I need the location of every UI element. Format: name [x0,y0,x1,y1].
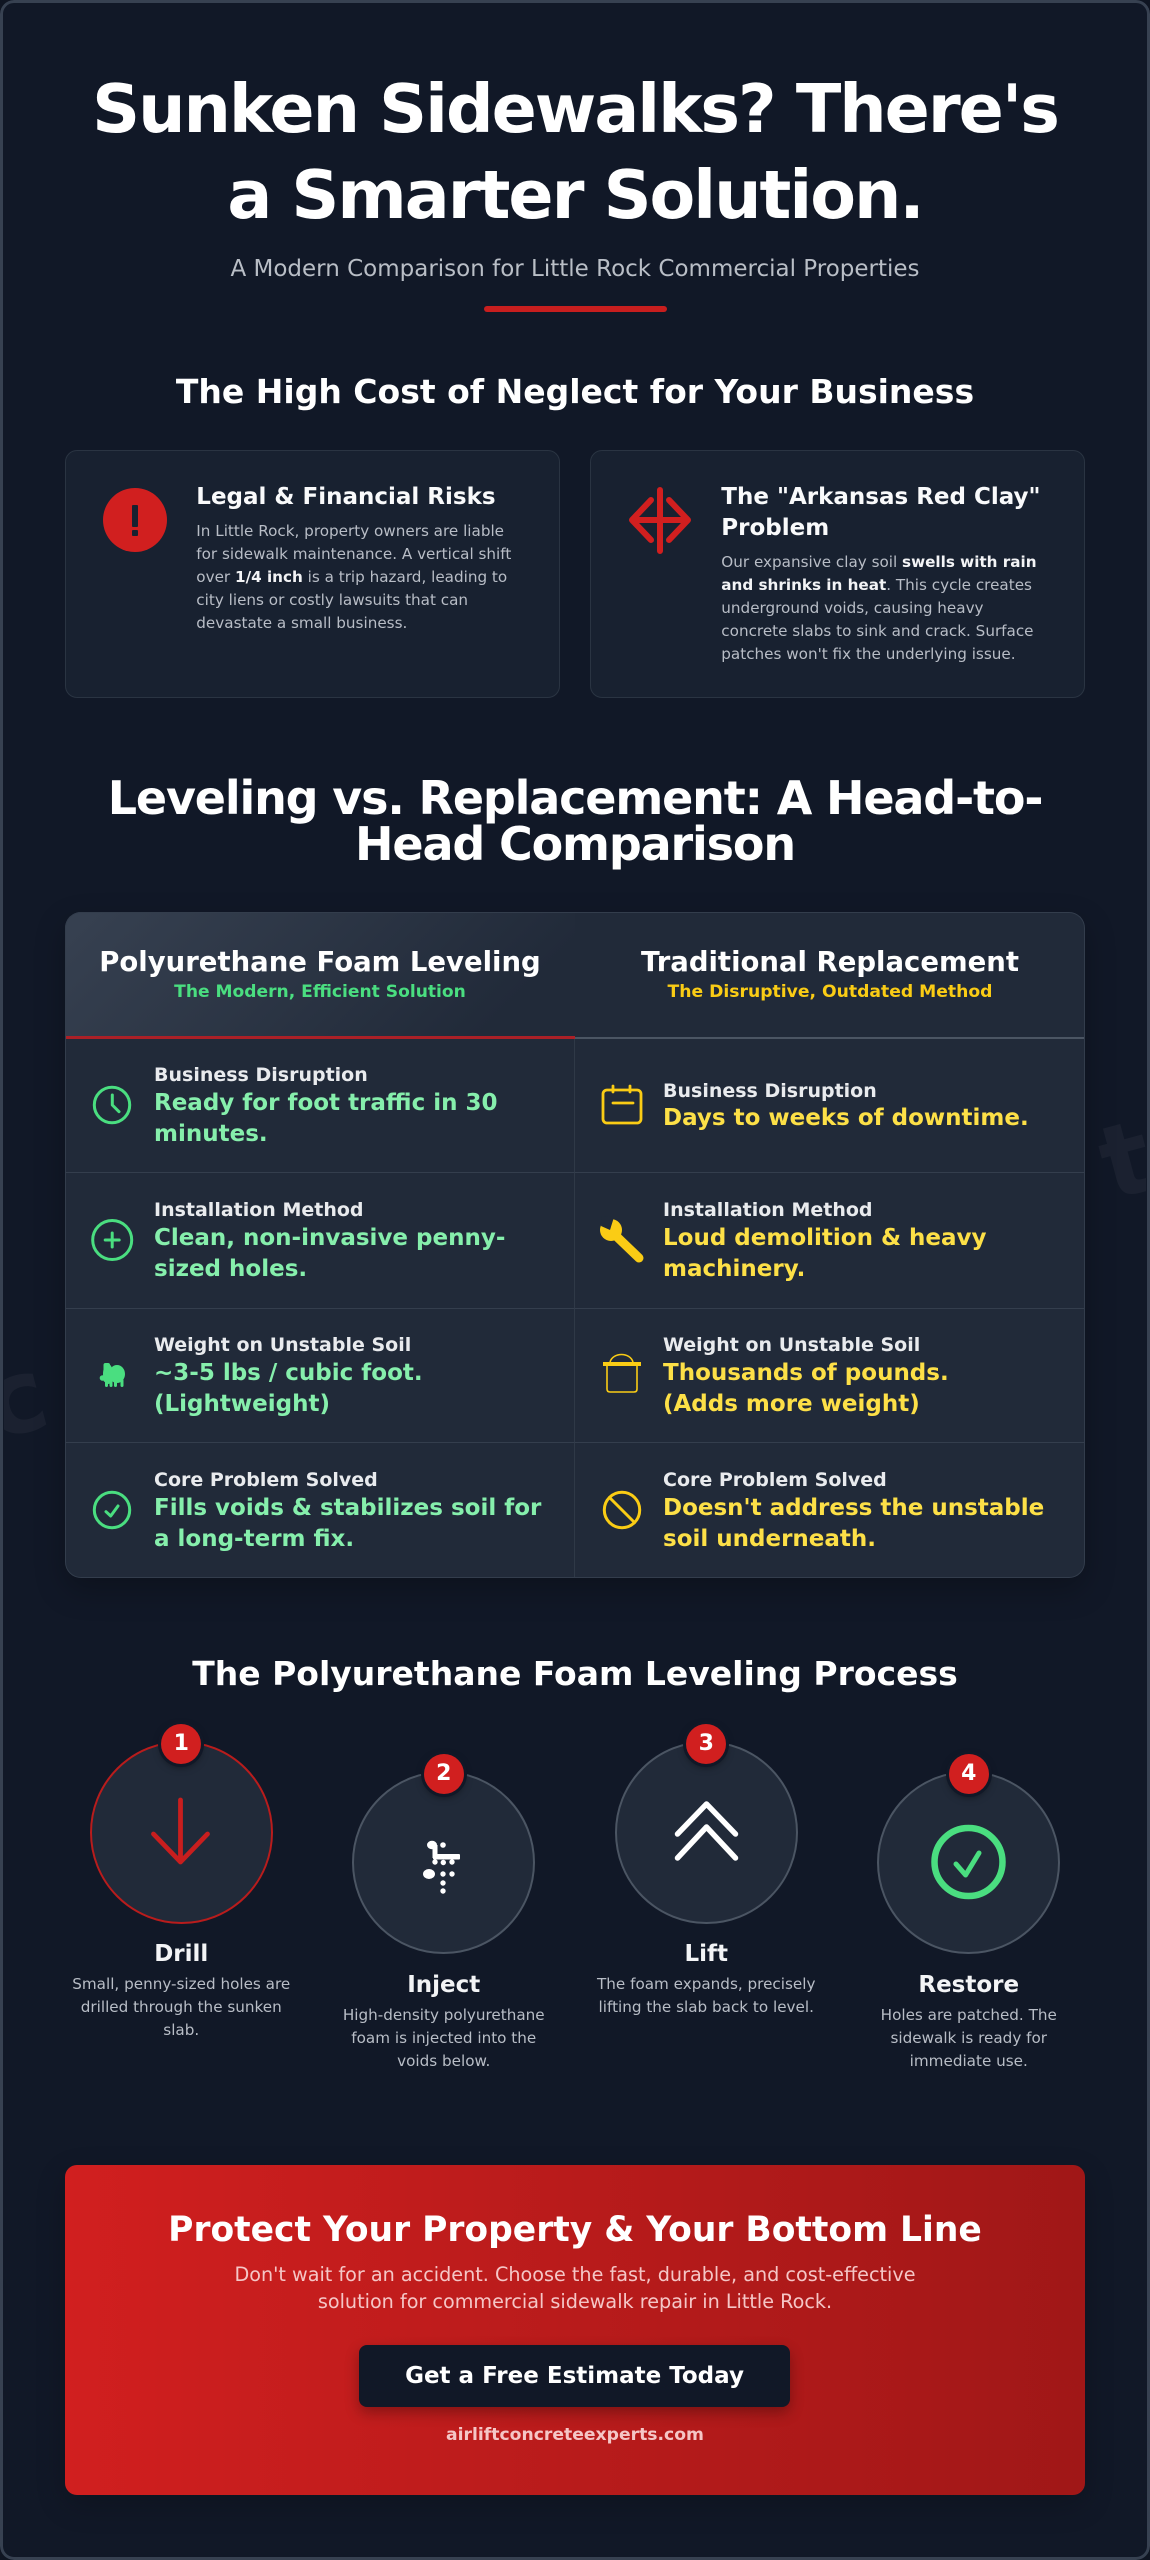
title: a Smarter Solution. [227,156,923,234]
row 2 left: installation method [65,1172,575,1308]
value: machinery. [663,1256,805,1282]
step description [343,2006,545,2070]
step circle with icon [877,1771,1060,1954]
panel: legal and financial risks [65,450,560,698]
column header: polyurethane foam leveling [65,912,575,1039]
step description [596,1975,815,2016]
row 3 right: weight on unstable soil [575,1308,1085,1442]
card body text: underground voids, causing heavy [721,599,984,617]
cta button [359,2345,790,2407]
icon: expanding soil arrows [629,487,691,554]
step title: Lift [684,1941,728,1967]
value: Clean, non-invasive penny- [154,1224,505,1250]
heading: foam leveling process: The Polyurethane Foam Leveling Process [192,1654,958,1693]
value [154,1090,497,1147]
step description: Holes are patched. The [881,2006,1057,2024]
website url: airliftconcreteexperts.com [446,2425,704,2445]
value: Days to weeks of downtime. [663,1104,1029,1130]
title [92,70,1058,234]
step description: immediate use. [910,2052,1028,2070]
step title: Inject [407,1972,480,1998]
cta button: Get a Free Estimate Today [405,2363,744,2389]
card body text [196,522,511,632]
card body text: In Little Rock, property owners are liable [196,522,504,540]
column header: traditional replacement [575,912,1085,1039]
heading: leveling vs replacement [108,771,1042,871]
value: Doesn't address the unstable [663,1494,1044,1520]
card body text: devastate a small business. [196,614,407,632]
row 1 right: business disruption [575,1039,1085,1172]
icon: check circle [92,1490,132,1530]
comparison table [65,912,1085,1578]
label: Installation Method [663,1199,873,1221]
heading: leveling vs replacement: Leveling vs. Replacement: A Head-to- [108,771,1042,825]
card body text: over 1/4 inch is a trip hazard, leading to [196,568,507,586]
card body text: Our expansive clay soil swells with rain [721,553,1037,571]
column subtitle: The Modern, Efficient Solution [174,982,466,1002]
card body text: concrete slabs to sink and crack. Surface [721,622,1034,640]
value: Loud demolition & heavy [663,1224,987,1250]
step description: slab. [163,2021,199,2039]
value: ~3-5 lbs / cubic foot. [154,1360,423,1386]
call to action panel [65,2165,1085,2495]
label: Core Problem Solved [663,1469,887,1491]
value: Thousands of pounds. [663,1360,949,1386]
step number [686,1724,726,1764]
value [154,1494,542,1552]
heading: leveling vs replacement: Head Comparison [355,817,795,871]
step title: Restore [918,1972,1019,1998]
value [663,1224,987,1282]
value: minutes. [154,1121,268,1147]
value [154,1224,505,1282]
step 2: inject [343,1754,545,2070]
panel: arkansas red clay problem [590,450,1085,698]
subtitle: A Modern Comparison for Little Rock Commercial Properties [230,256,920,282]
card body text: city liens or costly lawsuits that can [196,591,468,609]
value: soil underneath. [663,1526,876,1552]
value: (Adds more weight) [663,1390,920,1416]
value: (Lightweight) [154,1390,330,1416]
step 4: restore [877,1754,1060,2070]
step title: Drill [154,1941,208,1967]
step 1: drill [72,1724,290,2039]
step description [72,1975,290,2039]
value: sized holes. [154,1256,307,1282]
card heading: The "Arkansas Red Clay" [721,484,1041,510]
value [663,1360,949,1416]
step description: drilled through the sunken [81,1998,282,2016]
step description: Small, penny-sized holes are [72,1975,290,1993]
step number [161,1724,201,1764]
step circle with icon [90,1741,273,1924]
step description: sidewalk is ready for [890,2029,1047,2047]
label: Business Disruption [154,1064,368,1086]
card body text [721,553,1037,663]
step number: 3 [699,1731,714,1756]
cta heading: Protect Your Property & Your Bottom Line [168,2210,982,2250]
column subtitle: The Disruptive, Outdated Method [668,982,992,1002]
title accent bar [484,306,667,312]
card body text: patches won't fix the underlying issue. [721,645,1016,663]
value [154,1360,423,1416]
row 2 right: installation method [575,1172,1085,1308]
step number: 4 [961,1761,976,1786]
row 3 left: weight on unstable soil [65,1308,575,1442]
heading: high cost of neglect: The High Cost of Neglect for Your Business [176,372,974,411]
card heading [721,484,1041,540]
title: Sunken Sidewalks? There's [92,70,1058,148]
step description [881,2006,1057,2070]
value [663,1494,1044,1552]
icon: plus circle [91,1219,134,1261]
cta text: Don't wait for an accident. Choose the fast, durable, and cost-effective [234,2263,916,2286]
step description: lifting the slab back to level. [599,1998,814,2016]
icon: feather-light foam [100,1363,125,1387]
icon: heavy bucket [603,1354,641,1393]
row 4 right: core problem solved [575,1442,1085,1578]
label: Business Disruption [663,1080,877,1102]
step number: 1 [174,1731,189,1756]
icon: wrench [600,1219,644,1262]
label: Installation Method [154,1199,364,1221]
step description: voids below. [397,2052,490,2070]
step number [949,1754,989,1794]
step number: 2 [436,1761,451,1786]
step number [424,1754,464,1794]
step description: The foam expands, precisely [597,1975,815,1993]
card body text: for sidewalk maintenance. A vertical shift [196,545,511,563]
step description: foam is injected into the [351,2029,536,2047]
cta text: solution for commercial sidewalk repair in Little Rock. [318,2290,832,2313]
value: a long-term fix. [154,1526,354,1552]
row 1 left: business disruption [65,1039,575,1172]
value: Fills voids & stabilizes soil for [154,1494,541,1520]
icon: clock [92,1086,132,1124]
label: Core Problem Solved [154,1469,378,1491]
step circle with icon [352,1771,535,1954]
label: Weight on Unstable Soil [663,1334,920,1356]
step 3: lift [596,1724,815,2016]
cta text [234,2263,916,2313]
icon: warning circle [103,488,167,552]
label: Weight on Unstable Soil [154,1334,411,1356]
card heading: Problem [721,514,829,540]
background watermark [4,1097,1146,1464]
card heading: Legal & Financial Risks [196,484,496,510]
column title: Polyurethane Foam Leveling [99,946,541,978]
icon: prohibited sign [602,1490,642,1530]
icon: calendar [602,1084,642,1124]
card body text: and shrinks in heat. This cycle creates [721,576,1032,594]
step description: High-density polyurethane [343,2006,545,2024]
step circle with icon [615,1741,798,1924]
value: Ready for foot traffic in 30 [154,1090,497,1116]
row 4 left: core problem solved [65,1442,575,1578]
column title: Traditional Replacement [641,946,1019,978]
